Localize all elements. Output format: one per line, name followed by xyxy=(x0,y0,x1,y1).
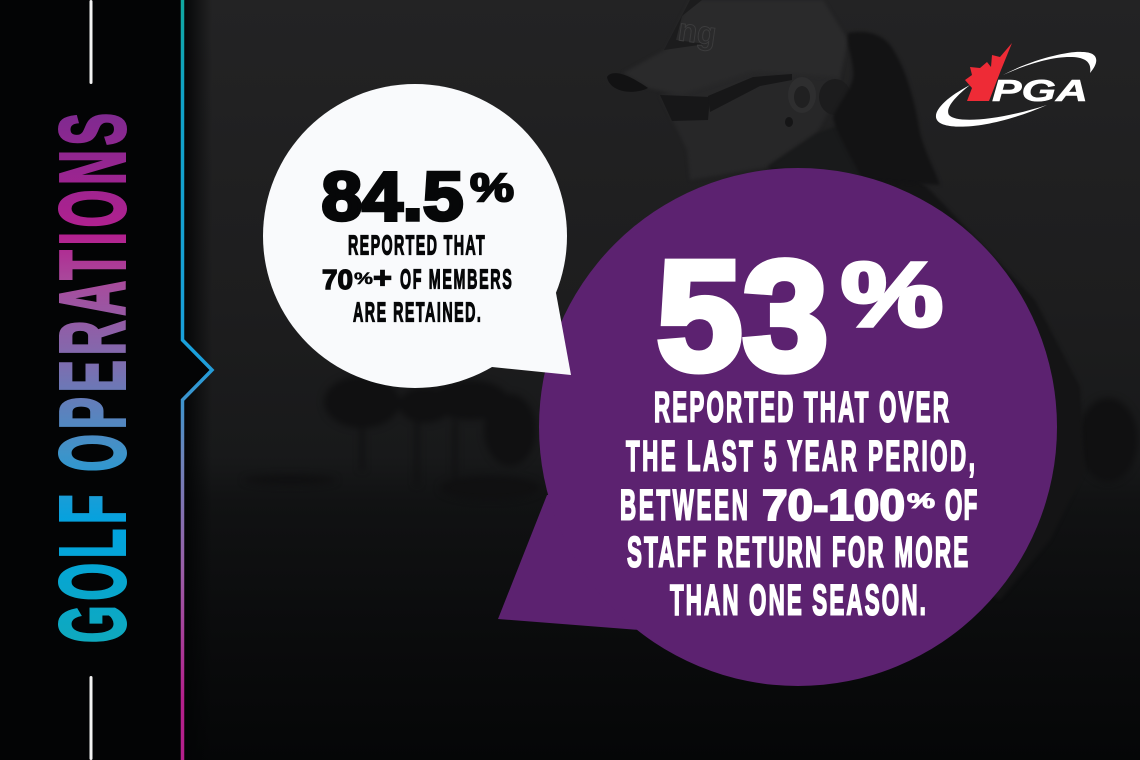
body text: % xyxy=(907,490,935,513)
palm tree right xyxy=(1078,398,1138,482)
big figure 84.5%: % xyxy=(470,166,514,210)
top white rule xyxy=(90,0,92,84)
body text: REPORTED THAT xyxy=(348,229,485,261)
cap logo mark: ng xyxy=(676,11,719,52)
golfer body xyxy=(770,123,1085,600)
purple speech bubble xyxy=(498,168,1057,686)
bubble shape xyxy=(263,84,567,388)
body text: BETWEEN xyxy=(620,482,748,530)
big figure 84.5%: 84.5 xyxy=(322,158,464,235)
body text: OF xyxy=(945,482,977,530)
logo: PGA of Canada xyxy=(936,43,1096,127)
sidebar panel xyxy=(0,0,213,760)
bottom white rule xyxy=(90,676,92,760)
chevron fill xyxy=(182,340,213,400)
white speech bubble xyxy=(263,84,571,388)
body text xyxy=(620,384,977,625)
collar xyxy=(767,123,865,180)
left edge shade xyxy=(182,0,212,760)
big figure 53%: 53 xyxy=(656,230,828,404)
cap logo shadow xyxy=(664,0,706,50)
golfer cap xyxy=(623,0,848,95)
cap bill shadow xyxy=(607,73,648,92)
body text: % xyxy=(354,269,373,288)
PGA wordmark: PGA xyxy=(992,73,1088,108)
body text: 70 xyxy=(322,264,353,295)
body text: + xyxy=(373,262,392,295)
maple leaf xyxy=(965,43,1012,101)
hair behind ear xyxy=(819,79,851,115)
body text xyxy=(322,229,512,328)
sunglasses xyxy=(660,74,792,121)
swoosh lower xyxy=(936,85,1047,127)
big figure 84.5% xyxy=(322,158,514,235)
golfer face xyxy=(660,70,840,180)
big figure 53% xyxy=(656,230,943,404)
ponytail xyxy=(833,32,940,185)
gradient rule with chevron xyxy=(182,0,212,760)
earring xyxy=(785,117,793,127)
body text: THE LAST 5 YEAR PERIOD, xyxy=(626,433,975,481)
bubble shape xyxy=(498,495,720,630)
body text: THAN ONE SEASON. xyxy=(670,577,926,625)
vertical title: GOLF OPERATIONS xyxy=(40,113,145,643)
big figure 53%: % xyxy=(841,245,943,346)
palm trees left xyxy=(244,376,540,500)
body text: 70-100 xyxy=(762,481,905,530)
body text: ARE RETAINED. xyxy=(353,296,481,328)
body text: STAFF RETURN FOR MORE xyxy=(627,529,968,577)
ear xyxy=(788,77,816,113)
body text: REPORTED THAT OVER xyxy=(654,384,949,432)
body text: OF MEMBERS xyxy=(400,263,512,295)
swoosh upper xyxy=(1003,52,1096,75)
